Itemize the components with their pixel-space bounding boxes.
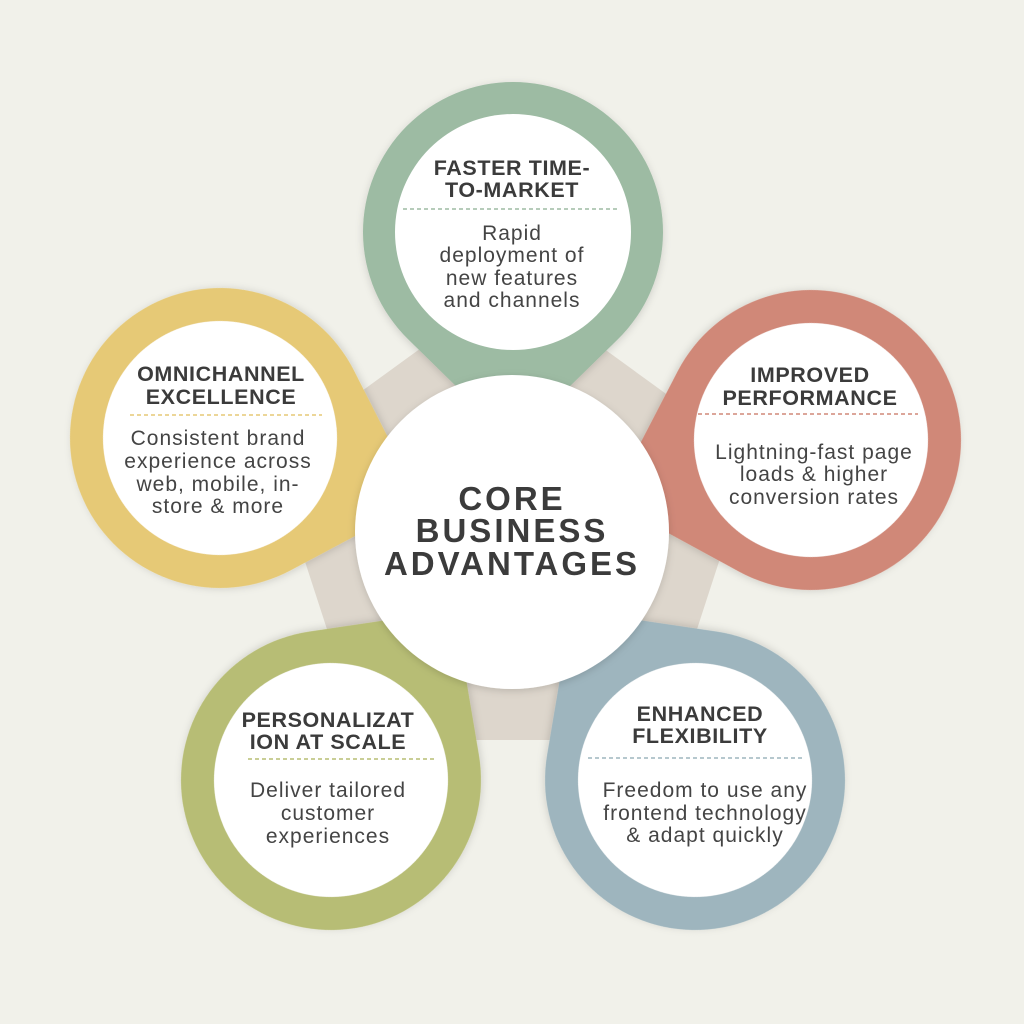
text: personalization at scale: [242, 708, 437, 848]
text: omnichannel excellence: EXCELLENCE: [146, 385, 296, 409]
ring: enhanced flexibility: [450, 522, 905, 990]
text: improved performance: [698, 363, 918, 509]
text: faster time-to-market: TO-MARKET: [445, 178, 579, 202]
ring: faster time-to-market: [363, 82, 663, 442]
text: enhanced flexibility: FLEXIBILITY: [632, 724, 768, 748]
text: personalization at scale: customer: [281, 802, 375, 825]
text: faster time-to-market: FASTER TIME-: [434, 156, 590, 180]
text: improved performance: PERFORMANCE: [722, 386, 898, 410]
ring: personalization at scale: [121, 522, 576, 990]
text: improved performance: conversion rates: [729, 486, 899, 509]
text: improved performance: Lightning-fast page: [715, 441, 913, 464]
center circle: CORE: [458, 480, 566, 517]
text: faster time-to-market: new features: [446, 267, 578, 290]
text: improved performance: loads & higher: [740, 463, 888, 486]
text: enhanced flexibility: frontend technology: [603, 802, 807, 825]
text: faster time-to-market: and channels: [444, 289, 580, 312]
ring: improved performance: [566, 253, 998, 645]
text: personalization at scale: PERSONALIZAT: [242, 708, 414, 732]
text: personalization at scale: Deliver tailored: [250, 779, 406, 802]
text: personalization at scale: experiences: [266, 825, 390, 848]
text: improved performance: IMPROVED: [750, 363, 870, 387]
text: enhanced flexibility: [588, 702, 807, 847]
text: enhanced flexibility: & adapt quickly: [626, 824, 784, 847]
text: omnichannel excellence: Consistent brand: [131, 427, 305, 450]
text: enhanced flexibility: ENHANCED: [637, 702, 763, 726]
text: omnichannel excellence: store & more: [152, 495, 284, 518]
center circle: [355, 375, 669, 689]
text: omnichannel excellence: OMNICHANNEL: [137, 362, 305, 386]
text: faster time-to-market: Rapid: [482, 222, 542, 245]
text: omnichannel excellence: [124, 362, 322, 518]
text: enhanced flexibility: Freedom to use any: [603, 779, 807, 802]
text: faster time-to-market: deployment of: [440, 244, 584, 267]
text: omnichannel excellence: experience across: [124, 450, 312, 473]
text: omnichannel excellence: web, mobile, in-: [135, 473, 300, 496]
center circle: BUSINESS: [416, 512, 608, 549]
center circle: ADVANTAGES: [384, 545, 640, 582]
text: personalization at scale: ION AT SCALE: [250, 730, 406, 754]
ring: omnichannel excellence: [32, 250, 465, 644]
text: faster time-to-market: [403, 156, 620, 312]
pentagon background: [271, 282, 753, 740]
